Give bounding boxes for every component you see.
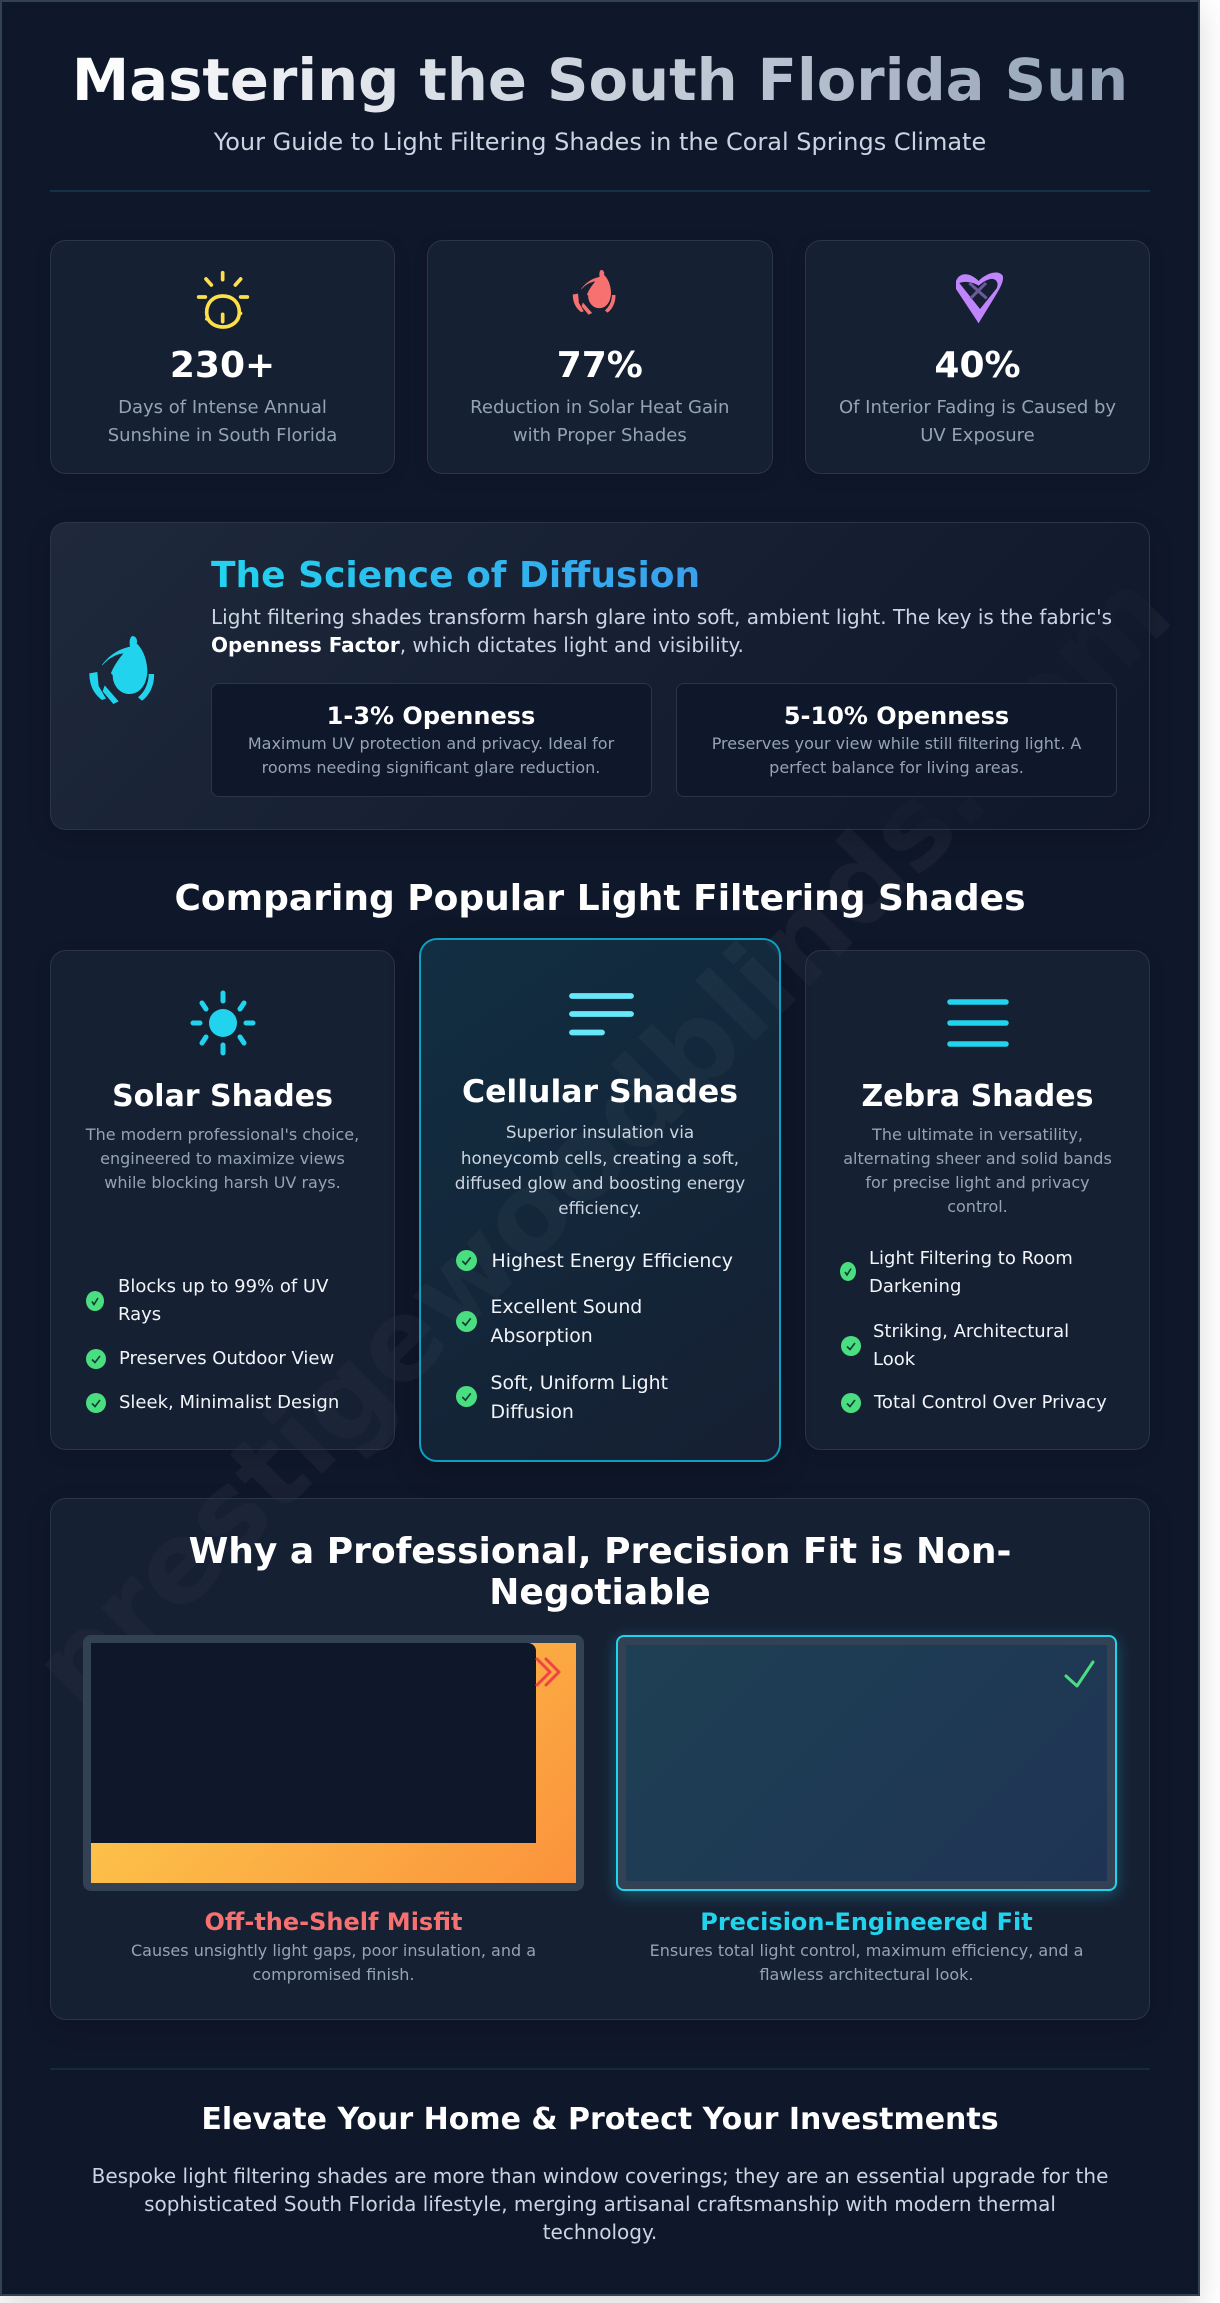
icon: cellular bands	[569, 993, 634, 1036]
stat number: 40%	[934, 344, 1021, 386]
openness description	[712, 734, 1082, 777]
check icon	[456, 1386, 477, 1407]
openness description: Maximum UV protection and privacy. Ideal for	[248, 734, 614, 753]
check icon	[86, 1291, 104, 1311]
openness description: Preserves your view while still filtering light. A	[712, 734, 1081, 753]
card description: for precise light and privacy	[865, 1172, 1090, 1192]
card title: Solar Shades	[112, 1079, 333, 1114]
check icon	[456, 1311, 477, 1332]
footer heading: Elevate Your Home & Protect Your Investments	[201, 2102, 999, 2137]
card description: control.	[947, 1196, 1008, 1216]
stat label: Reduction in Solar Heat Gain	[470, 397, 729, 418]
stat card: sunshine days	[50, 240, 395, 474]
window: precision fit	[616, 1635, 1117, 1891]
card description: alternating sheer and solid bands	[843, 1148, 1112, 1168]
footer text: sophisticated South Florida lifestyle, merging artisanal craftsmanship with modern thermal	[144, 2192, 1056, 2216]
stat number: 77%	[557, 344, 643, 386]
caption: misfit text: Causes unsightly light gaps, poor insulation, and a	[131, 1941, 536, 1960]
stat label	[108, 397, 337, 446]
icon: check	[1064, 1660, 1095, 1688]
feature item	[118, 1276, 328, 1325]
card description	[843, 1124, 1112, 1216]
window shade	[91, 1643, 536, 1843]
caption: precision text	[650, 1941, 1083, 1984]
openness heading: 5-10% Openness	[784, 702, 1009, 730]
feature item: Look	[873, 1349, 915, 1370]
window: off-the-shelf misfit	[83, 1635, 584, 1891]
feature item: Light Filtering to Room	[869, 1248, 1073, 1269]
feature item: Darkening	[869, 1276, 961, 1297]
feature item	[873, 1321, 1069, 1370]
science text: Light filtering shades transform harsh glare into soft, ambient light. The key is the fabric's	[211, 605, 1112, 629]
caption: precision: Precision-Engineered Fit	[700, 1908, 1033, 1936]
card description: The modern professional's choice,	[86, 1124, 359, 1144]
icon: light gap chevrons	[535, 1657, 560, 1686]
feature item: Striking, Architectural	[873, 1321, 1069, 1342]
card description: Superior insulation via	[506, 1122, 694, 1142]
card description: efficiency.	[558, 1198, 642, 1218]
subtitle: Your Guide to Light Filtering Shades in the Coral Springs Climate	[214, 128, 986, 156]
feature item	[490, 1372, 668, 1423]
openness heading: 1-3% Openness	[327, 702, 535, 730]
card title: Zebra Shades	[862, 1079, 1093, 1114]
panel: precision fit	[50, 1498, 1150, 2020]
check icon	[840, 1262, 856, 1281]
icon: heart with cross	[956, 272, 1003, 324]
fitted shade	[626, 1645, 1107, 1881]
stat card: fading	[805, 240, 1150, 474]
icon: sun	[190, 990, 256, 1056]
card description	[455, 1122, 745, 1218]
panel: science of diffusion	[50, 522, 1150, 830]
feature item: Excellent Sound	[490, 1296, 642, 1318]
caption: misfit text: compromised finish.	[252, 1965, 415, 1984]
panel: solar shades	[50, 950, 395, 1450]
feature item	[869, 1248, 1073, 1297]
caption: precision text: flawless architectural look.	[759, 1965, 974, 1984]
stat label	[470, 397, 729, 446]
stat label: with Proper Shades	[513, 425, 687, 446]
openness card 1-3%	[210, 683, 652, 797]
check icon	[86, 1349, 106, 1369]
card description: The ultimate in versatility,	[872, 1124, 1083, 1144]
feature item: Blocks up to 99% of UV	[118, 1276, 328, 1297]
feature item: Total Control Over Privacy	[874, 1392, 1107, 1413]
stat number: 230+	[170, 344, 275, 386]
fit heading	[189, 1530, 1011, 1612]
science heading: The Science of Diffusion	[211, 554, 700, 596]
footer text: technology.	[543, 2220, 657, 2244]
icon: diffusion drop	[89, 636, 154, 704]
fit heading: Why a Professional, Precision Fit is Non-	[189, 1530, 1011, 1572]
comparison heading: Comparing Popular Light Filtering Shades	[174, 878, 1026, 918]
stat card: heat reduction	[427, 240, 773, 474]
science text	[211, 605, 1112, 657]
card description: while blocking harsh UV rays.	[104, 1172, 341, 1192]
card description	[86, 1124, 359, 1192]
watermark: prestigewoodblinds.com	[8, 546, 1196, 1734]
feature item: Sleek, Minimalist Design	[119, 1392, 339, 1413]
card title: Cellular Shades	[462, 1074, 738, 1110]
stat label: Days of Intense Annual	[118, 397, 327, 418]
panel: cellular shades (featured)	[419, 938, 781, 1462]
card description: diffused glow and boosting energy	[455, 1173, 745, 1193]
icon: zebra bands	[947, 999, 1009, 1047]
feature item: Diffusion	[490, 1401, 574, 1423]
icon: sun	[196, 270, 250, 329]
footer text: Bespoke light filtering shades are more than window coverings; they are an essential upgrade for the	[92, 2164, 1108, 2188]
card description: honeycomb cells, creating a soft,	[461, 1148, 739, 1168]
stat label: Of Interior Fading is Caused by	[839, 397, 1116, 418]
fit heading: Negotiable	[489, 1572, 711, 1612]
panel: zebra shades	[805, 950, 1150, 1450]
icon: heat	[572, 270, 616, 315]
feature item: Absorption	[490, 1325, 593, 1347]
stat label: Sunshine in South Florida	[108, 425, 337, 446]
science text: Openness Factor, which dictates light and visibility.	[211, 633, 744, 657]
check icon	[841, 1393, 861, 1413]
openness description: rooms needing significant glare reduction.	[262, 758, 600, 777]
feature item: Highest Energy Efficiency	[492, 1250, 733, 1272]
feature item: Soft, Uniform Light	[490, 1372, 668, 1394]
feature item	[490, 1296, 642, 1347]
check icon	[86, 1393, 106, 1413]
title: Mastering the South Florida Sun	[72, 47, 1128, 114]
caption: misfit: Off-the-Shelf Misfit	[205, 1908, 462, 1936]
feature item: Rays	[118, 1304, 161, 1325]
openness description: perfect balance for living areas.	[769, 758, 1024, 777]
openness description	[248, 734, 614, 777]
footer text	[92, 2164, 1108, 2244]
stat label: UV Exposure	[920, 425, 1035, 446]
check icon	[841, 1336, 861, 1356]
caption: misfit text	[131, 1941, 536, 1984]
check icon	[456, 1250, 477, 1271]
feature item: Preserves Outdoor View	[119, 1348, 334, 1369]
caption: precision text: Ensures total light control, maximum efficiency, and a	[650, 1941, 1083, 1960]
card description: engineered to maximize views	[100, 1148, 345, 1168]
stat label	[839, 397, 1116, 446]
openness card 5-10%	[676, 683, 1117, 797]
